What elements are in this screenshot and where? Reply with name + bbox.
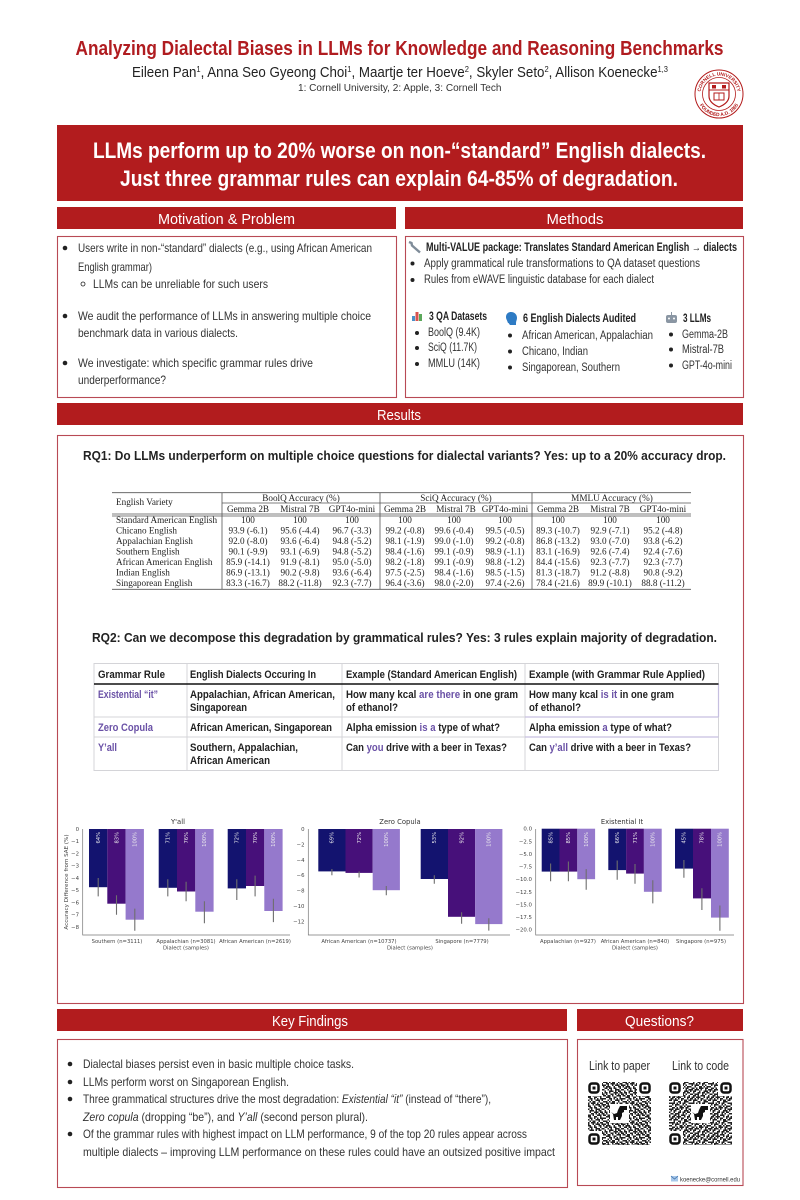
heading: Key Findings xyxy=(57,1009,567,1031)
column: LLMs xyxy=(669,313,732,372)
table: accuracy by dialect: 95.0 (-5.0) xyxy=(332,557,372,567)
column: QA datasets xyxy=(415,311,487,370)
table: accuracy by dialect: 93.6 (-6.4) xyxy=(280,536,320,546)
authors: , Skyler Seto xyxy=(469,64,544,81)
table: grammar rules: Example (Standard American English) xyxy=(346,669,517,681)
panel: motivation: LLMs can be unreliable for such users xyxy=(93,277,268,291)
authors: 1,3 xyxy=(657,64,668,74)
table: accuracy by dialect: 96.4 (-3.6) xyxy=(385,578,425,588)
bar chart: Existential It: 78% xyxy=(700,832,706,844)
table: accuracy by dialect: 97.4 (-2.6) xyxy=(485,578,525,588)
methods bullets xyxy=(410,258,700,286)
authors: , Anna Seo Gyeong Choi xyxy=(201,64,347,81)
table: accuracy by dialect: BoolQ Accuracy (%) xyxy=(262,493,340,503)
panel: key findings: Dialectal biases persist even in basic multiple choice tasks. xyxy=(83,1057,354,1071)
panel: key findings: LLMs perform worst on Singaporean English. xyxy=(83,1075,289,1089)
bar chart: Y'all: −3 xyxy=(71,864,79,870)
table: accuracy by dialect: 100 xyxy=(241,515,255,525)
table: grammar rules: African American xyxy=(190,755,270,767)
heading: RQ1: RQ1: Do LLMs underperform on multiple choice questions for dialectal variants? Yes: up to a 20% accuracy drop. xyxy=(83,448,726,463)
column: dialects: 6 English Dialects Audited xyxy=(523,313,636,325)
table: grammar rules: of ethanol? xyxy=(529,702,581,714)
panel: motivation: We investigate: which specific grammar rules drive xyxy=(78,356,313,370)
bar chart: Existential It: 100% xyxy=(584,832,590,847)
table: accuracy by dialect: 88.8 (-11.2) xyxy=(641,578,685,588)
heading: Motivation & Problem: Motivation & Problem xyxy=(158,211,295,228)
table: accuracy by dialect: 90.1 (-9.9) xyxy=(228,546,268,556)
bar chart: Existential It: 85% xyxy=(566,832,572,844)
bar chart: Existential It: African American (n=840) xyxy=(601,939,669,945)
bar chart: Y'all: 100% xyxy=(133,832,139,847)
bar chart: Zero Copula: −12 xyxy=(293,919,304,925)
table: accuracy by dialect: 98.8 (-1.2) xyxy=(485,557,525,567)
table: grammar rules: Existential “it” xyxy=(98,689,158,701)
table: accuracy by dialect: SciQ Accuracy (%) xyxy=(420,493,492,503)
table: accuracy by dialect: 92.4 (-7.6) xyxy=(643,546,683,556)
heading: Methods: Methods xyxy=(546,211,604,228)
QR code: code xyxy=(668,1081,733,1146)
table: grammar rules: Alpha emission is a type of what? xyxy=(346,722,500,734)
authors: 2 xyxy=(465,64,469,74)
bar chart: Existential It: −20.0 xyxy=(515,928,533,934)
authors: 1 xyxy=(196,64,201,74)
bar chart: Existential It: −12.5 xyxy=(515,890,532,896)
table: accuracy by dialect: 90.2 (-9.8) xyxy=(280,568,320,578)
bar chart: Existential It: Dialect (samples) xyxy=(612,946,658,952)
table: accuracy by dialect: Gemma 2B xyxy=(384,504,426,514)
logo: Cornell University seal xyxy=(694,70,744,118)
table: accuracy by dialect: 99.1 (-0.9) xyxy=(434,546,474,556)
heading: Motivation & Problem xyxy=(57,207,396,229)
column: QA datasets: SciQ (11.7K) xyxy=(428,342,477,354)
table: accuracy by dialect: 100 xyxy=(551,515,565,525)
table: accuracy by dialect: 93.1 (-6.9) xyxy=(280,546,320,556)
bar chart: Existential It: 71% xyxy=(633,832,639,844)
table: accuracy by dialect: 93.0 (-7.0) xyxy=(590,536,630,546)
heading: RQ2: RQ2: Can we decompose this degradation by grammatical rules? Yes: 3 rules explain majority of degradation. xyxy=(92,630,717,645)
heading: Methods xyxy=(405,207,743,229)
table: grammar rules: How many kcal is it in one gram xyxy=(529,689,674,701)
panel: motivation: underperformance? xyxy=(78,373,166,387)
table: grammar rules: Can you drive with a beer in Texas? xyxy=(346,742,507,754)
bar chart: Zero Copula: 0 xyxy=(301,827,305,833)
panel: key findings xyxy=(58,1040,568,1188)
bar chart: Y'all: Southern (n=3111) xyxy=(92,939,142,945)
table: grammar rules: Y’all xyxy=(98,742,117,754)
table: accuracy by dialect: 100 xyxy=(447,515,461,525)
table: grammar rules: of ethanol? xyxy=(346,702,398,714)
panel: methods xyxy=(406,236,744,398)
bar chart: Zero Copula: Zero Copula xyxy=(379,818,421,826)
table: accuracy by dialect: 84.4 (-15.6) xyxy=(536,557,580,567)
table: accuracy by dialect: 92.6 (-7.4) xyxy=(590,546,630,556)
table: grammar rules: English Dialects Occuring In xyxy=(190,669,316,681)
authors: 2 xyxy=(544,64,549,74)
table: accuracy by dialect: 96.7 (-3.3) xyxy=(332,526,372,536)
table: accuracy by dialect: 99.2 (-0.8) xyxy=(385,526,425,536)
bar chart: Existential It: Singapore (n=975) xyxy=(676,939,726,945)
table: accuracy by dialect: 81.3 (-18.7) xyxy=(536,568,580,578)
bar chart: Existential It: 66% xyxy=(615,832,621,844)
bar chart: Y'all: −2 xyxy=(71,852,79,858)
contact email: koenecke@cornell.edu xyxy=(680,1176,740,1184)
table: accuracy by dialect: 94.8 (-5.2) xyxy=(332,546,372,556)
table: accuracy by dialect: 100 xyxy=(293,515,307,525)
bar chart: Y'all: 76% xyxy=(184,832,190,844)
table: accuracy by dialect: 91.2 (-8.8) xyxy=(590,568,630,578)
link to paper label: Link to paper xyxy=(589,1059,650,1073)
table: accuracy by dialect: Indian English xyxy=(116,568,170,578)
bar chart: Y'all: African American (n=2619) xyxy=(219,939,291,945)
heading: Questions: Questions? xyxy=(625,1013,694,1030)
table: accuracy by dialect: 83.3 (-16.7) xyxy=(226,578,270,588)
column: LLMs: Mistral-7B xyxy=(682,344,724,356)
table: accuracy by dialect: 99.1 (-0.9) xyxy=(434,557,474,567)
icon: robot xyxy=(666,312,677,323)
column: QA datasets: MMLU (14K) xyxy=(428,358,480,370)
table: accuracy by dialect: 98.2 (-1.8) xyxy=(385,557,425,567)
bar chart: Existential It: −15.0 xyxy=(515,902,533,908)
bar chart: Y'all: Dialect (samples) xyxy=(163,946,209,952)
bar chart: Existential It: 0.0 xyxy=(523,827,533,833)
table: grammar rules: Appalachian, African American, xyxy=(190,689,335,701)
bar chart: Y'all: 64% xyxy=(96,832,102,844)
bar chart: Existential It: 100% xyxy=(718,832,724,847)
table: accuracy by dialect: 93.6 (-6.4) xyxy=(332,568,372,578)
table: accuracy by dialect: 83.1 (-16.9) xyxy=(536,546,580,556)
bar chart: Y'all: −7 xyxy=(71,913,79,919)
link to code label: Link to code xyxy=(672,1059,729,1073)
table: accuracy by dialect: GPT4o-mini xyxy=(482,504,529,514)
bar chart: Y'all: −5 xyxy=(71,888,79,894)
table: accuracy by dialect: 89.9 (-10.1) xyxy=(588,578,632,588)
authors: 1 xyxy=(347,64,352,74)
table: grammar rules: Grammar Rule xyxy=(98,669,165,681)
table: accuracy by dialect: 95.6 (-4.4) xyxy=(280,526,320,536)
table: accuracy by dialect: 100 xyxy=(498,515,512,525)
table: grammar rules xyxy=(94,663,718,771)
table: accuracy by dialect: 100 xyxy=(603,515,617,525)
bar chart: Existential It: Existential It xyxy=(601,818,644,826)
bar chart: Zero Copula: African American (n=10737) xyxy=(321,939,397,945)
panel: key findings: Of the grammar rules with highest impact on LLM performance, 9 of the top 20 rules appear across xyxy=(83,1127,527,1141)
bar chart: Zero Copula: −10 xyxy=(293,904,305,910)
table: accuracy by dialect: 100 xyxy=(398,515,412,525)
bar chart: Zero Copula xyxy=(293,818,510,952)
table: accuracy by dialect: 93.8 (-6.2) xyxy=(643,536,683,546)
table: accuracy by dialect: 88.2 (-11.8) xyxy=(278,578,322,588)
table: accuracy by dialect: 94.8 (-5.2) xyxy=(332,536,372,546)
panel: motivation: benchmark data in various dialects. xyxy=(78,326,238,340)
table: accuracy by dialect: 100 xyxy=(656,515,670,525)
table: accuracy by dialect: 92.9 (-7.1) xyxy=(590,526,630,536)
table: accuracy by dialect: 85.9 (-14.1) xyxy=(226,557,270,567)
table: grammar rules: How many kcal are there in one gram xyxy=(346,689,518,701)
heading: Results xyxy=(57,403,743,425)
panel: key findings: Three grammatical structures drive the most degradation: Existential “it” (instead of “there”), xyxy=(83,1092,491,1106)
table: accuracy by dialect: English Variety xyxy=(116,497,173,507)
table: accuracy by dialect: 95.2 (-4.8) xyxy=(643,526,683,536)
table: accuracy by dialect: Gemma 2B xyxy=(537,504,579,514)
bar chart: Y'all: Appalachian (n=3081) xyxy=(156,939,216,945)
table: accuracy by dialect xyxy=(112,493,691,589)
table: accuracy by dialect: GPT4o-mini xyxy=(329,504,376,514)
column: dialects: Singaporean, Southern xyxy=(522,362,620,374)
table: accuracy by dialect: Mistral 7B xyxy=(436,504,476,514)
logo: Cornell University seal: FOUNDED A.D. 1865 xyxy=(700,103,738,116)
table: accuracy by dialect: 86.8 (-13.2) xyxy=(536,536,580,546)
table: accuracy by dialect: 98.5 (-1.5) xyxy=(485,568,525,578)
column: dialects: African American, Appalachian xyxy=(522,330,653,342)
column: dialects: Chicano, Indian xyxy=(522,346,588,358)
table: grammar rules: Southern, Appalachian, xyxy=(190,742,298,754)
bar chart: Y'all: 0 xyxy=(76,827,80,833)
table: accuracy by dialect: 78.4 (-21.6) xyxy=(536,578,580,588)
table: accuracy by dialect: 86.9 (-13.1) xyxy=(226,568,270,578)
bar chart: Y'all: 71% xyxy=(166,832,172,844)
panel: motivation: English grammar) xyxy=(78,260,152,274)
table: accuracy by dialect: 98.4 (-1.6) xyxy=(434,568,474,578)
panel: motivation: Users write in non-“standard” dialects (e.g., using African American xyxy=(78,241,372,255)
heading: Questions xyxy=(577,1009,743,1031)
panel: key findings: Zero copula (dropping “be”), and Y’all (second person plural). xyxy=(82,1110,368,1124)
bar chart: Existential It: −2.5 xyxy=(519,839,532,845)
table: accuracy by dialect: 99.2 (-0.8) xyxy=(485,536,525,546)
table: accuracy by dialect: 99.5 (-0.5) xyxy=(485,526,525,536)
bar chart: Existential It: −5.0 xyxy=(519,852,533,858)
table: accuracy by dialect: MMLU Accuracy (%) xyxy=(571,493,653,503)
authors: , Allison Koenecke xyxy=(549,64,657,81)
bar chart: Y'all: Accuracy Difference from SAE (%) xyxy=(64,834,70,930)
table: accuracy by dialect: 98.4 (-1.6) xyxy=(385,546,425,556)
panel: motivation: We audit the performance of LLMs in answering multiple choice xyxy=(78,309,371,323)
column: LLMs: 3 LLMs xyxy=(683,313,711,325)
bar chart: Zero Copula: 69% xyxy=(330,832,336,844)
table: accuracy by dialect: Southern English xyxy=(116,546,180,556)
table: accuracy by dialect: Singaporean English xyxy=(116,578,193,588)
table: accuracy by dialect: GPT4o-mini xyxy=(640,504,687,514)
table: accuracy by dialect: Chicano English xyxy=(116,526,177,536)
QR code: paper xyxy=(587,1081,652,1146)
bar chart: Zero Copula: 53% xyxy=(432,832,438,844)
icon: bar chart xyxy=(412,312,422,321)
banner: key message: Just three grammar rules can explain 64-85% of degradation. xyxy=(120,166,678,191)
bar chart: Y'all: 83% xyxy=(114,832,120,844)
icon: email xyxy=(671,1176,678,1182)
table: accuracy by dialect: Mistral 7B xyxy=(280,504,320,514)
bar chart: Zero Copula: Singapore (n=7779) xyxy=(435,939,489,945)
table: accuracy by dialect: Gemma 2B xyxy=(227,504,269,514)
bar chart: Y'all xyxy=(64,818,291,952)
bar chart: Y'all: −8 xyxy=(71,925,80,931)
bar chart: Zero Copula: −6 xyxy=(297,873,305,879)
table: accuracy by dialect: 100 xyxy=(345,515,359,525)
table: accuracy by dialect: 97.5 (-2.5) xyxy=(385,568,425,578)
bar chart: Y'all: Y'all xyxy=(170,818,185,826)
bar chart: Y'all: −1 xyxy=(71,839,79,845)
bar chart: Zero Copula: 92% xyxy=(459,832,465,844)
methods bullets: Rules from eWAVE linguistic database for each dialect xyxy=(424,274,655,286)
affiliations: 1: Cornell University, 2: Apple, 3: Cornell Tech xyxy=(298,83,502,94)
bar chart: Existential It: −17.5 xyxy=(515,915,532,921)
bar chart: Existential It: 45% xyxy=(682,832,688,844)
bar chart: Existential It: −10.0 xyxy=(515,877,533,883)
table: accuracy by dialect: 99.0 (-1.0) xyxy=(434,536,474,546)
methods bullets: Apply grammatical rule transformations to QA dataset questions xyxy=(424,258,700,270)
table: accuracy by dialect: 91.9 (-8.1) xyxy=(280,557,320,567)
table: grammar rules: Zero Copula xyxy=(98,722,154,734)
table: accuracy by dialect: 98.1 (-1.9) xyxy=(385,536,425,546)
bar chart: Zero Copula: 100% xyxy=(384,832,390,847)
panel: key findings: multiple dialects – improving LLM performance on these rules could have an outsized positive impact xyxy=(83,1145,556,1159)
table: accuracy by dialect: Standard American English xyxy=(116,515,217,525)
table: accuracy by dialect: 90.8 (-9.2) xyxy=(643,568,683,578)
bar chart: Zero Copula: 100% xyxy=(487,832,493,847)
table: accuracy by dialect: 92.0 (-8.0) xyxy=(228,536,268,546)
table: grammar rules: Alpha emission a type of what? xyxy=(529,722,672,734)
bar chart: Y'all: −4 xyxy=(71,876,80,882)
bar chart: Existential It: −7.5 xyxy=(519,865,532,871)
bar chart: Existential It: 100% xyxy=(651,832,657,847)
banner: key message xyxy=(57,125,743,201)
panel: results xyxy=(58,436,744,1004)
table: accuracy by dialect: Appalachian English xyxy=(116,536,193,546)
column: LLMs: Gemma-2B xyxy=(682,329,728,341)
table: grammar rules: Singaporean xyxy=(190,702,247,714)
bar chart: Zero Copula: Dialect (samples) xyxy=(387,946,433,952)
authors: , Maartje ter Hoeve xyxy=(351,64,465,81)
column: LLMs: GPT-4o-mini xyxy=(682,360,732,372)
column: QA datasets: BoolQ (9.4K) xyxy=(428,327,480,339)
table: accuracy by dialect: 89.3 (-10.7) xyxy=(536,526,580,536)
table: accuracy by dialect: 98.9 (-1.1) xyxy=(485,546,525,556)
bar chart: Existential It: 85% xyxy=(548,832,554,844)
table: accuracy by dialect: 92.3 (-7.7) xyxy=(643,557,683,567)
table: accuracy by dialect: African American English xyxy=(116,557,213,567)
table: accuracy by dialect: 92.3 (-7.7) xyxy=(590,557,630,567)
table: grammar rules: Example (with Grammar Rule Applied) xyxy=(529,669,705,681)
table: accuracy by dialect: 98.0 (-2.0) xyxy=(434,578,474,588)
icon: wrench xyxy=(409,242,420,252)
bar chart: Existential It xyxy=(515,818,734,952)
bar chart: Y'all: 70% xyxy=(253,832,259,844)
authors: Eileen Pan xyxy=(132,64,205,81)
column: QA datasets: 3 QA Datasets xyxy=(429,311,487,323)
bar chart: Y'all: −6 xyxy=(71,900,80,906)
table: accuracy by dialect: 92.3 (-7.7) xyxy=(332,578,372,588)
bar chart: Zero Copula: −2 xyxy=(297,842,304,848)
table: grammar rules: African American, Singaporean xyxy=(190,722,332,734)
logo: Cornell University seal: CORNELL UNIVERSITY xyxy=(698,72,741,92)
banner: key message: LLMs perform up to 20% worse on non-“standard” English dialects. xyxy=(93,138,706,163)
bar chart: Y'all: 100% xyxy=(202,832,208,847)
bar chart: Zero Copula: 72% xyxy=(357,832,363,844)
heading: Results: Results xyxy=(377,407,421,424)
bar chart: Zero Copula: −8 xyxy=(297,889,305,895)
panel: questions xyxy=(578,1040,743,1186)
table: accuracy by dialect: 93.9 (-6.1) xyxy=(228,526,268,536)
bar chart: Existential It: Appalachian (n=927) xyxy=(540,939,596,945)
bar chart: Zero Copula: −4 xyxy=(297,858,305,864)
heading: Key Findings: Key Findings xyxy=(272,1013,348,1030)
table: accuracy by dialect: Mistral 7B xyxy=(590,504,630,514)
icon: speaking head xyxy=(506,312,517,325)
column: dialects xyxy=(508,313,653,374)
panel: motivation xyxy=(58,236,396,398)
bar chart: Y'all: 72% xyxy=(235,832,241,844)
table: grammar rules: Can y’all drive with a beer in Texas? xyxy=(529,742,691,754)
bar chart: Y'all: 100% xyxy=(271,832,277,847)
table: accuracy by dialect: 99.6 (-0.4) xyxy=(434,526,474,536)
